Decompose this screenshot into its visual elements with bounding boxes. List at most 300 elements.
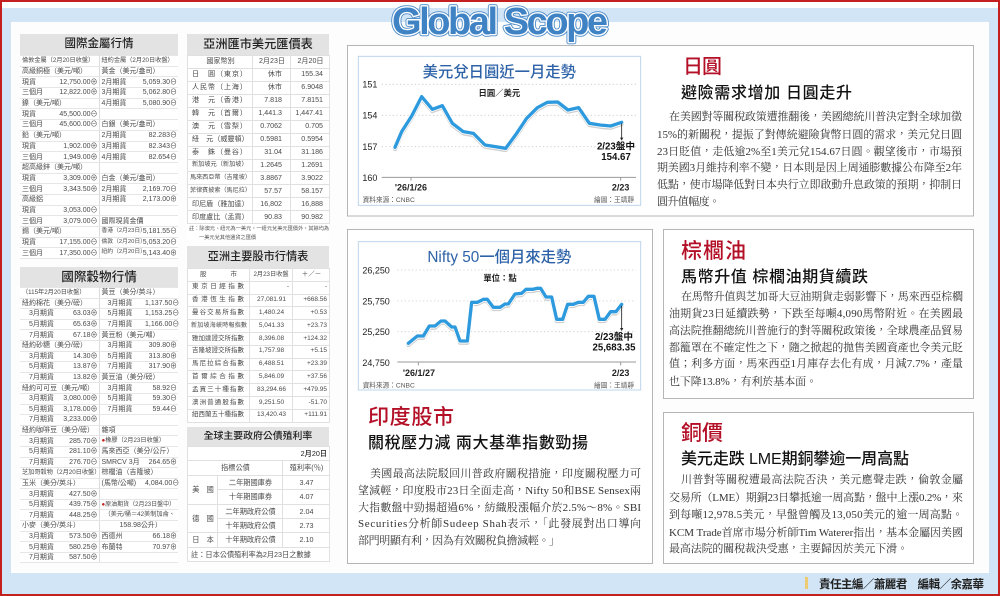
table: grain quotes: 3月期貨 xyxy=(108,385,132,392)
table: metals quotes: 3,343.50⊕ xyxy=(63,186,98,193)
table: metals quotes: 鎳（美元/噸） xyxy=(22,100,66,107)
table: grain quotes: 317.90⊕ xyxy=(149,363,177,370)
table: metals quotes xyxy=(20,55,178,259)
title: Global Scope: Global Scope xyxy=(392,1,608,43)
chart: USD/JPY one month: 151 xyxy=(362,80,377,90)
heading: copper: 銅價 xyxy=(681,422,723,445)
table: grain quotes: 67.18⊕ xyxy=(73,332,98,339)
table: stock indices: 紐西蘭五十種指數 xyxy=(192,411,244,418)
table: metals quotes: 3,079.00⊖ xyxy=(63,218,98,225)
table: grain quotes: 紐約棉花（美分/磅） xyxy=(22,300,87,307)
table: metals quotes: 12,822.00⊕ xyxy=(59,89,98,96)
table: grain quotes: 5月期貨 xyxy=(29,321,54,328)
table: FX quotes: 印尼盾（雅加達） xyxy=(192,200,249,208)
text block: yen: 低點，使市場降低對日本央行立即啟動升息政策的預期，抑制日 xyxy=(657,177,962,191)
table: grain quotes: 158.98公升） xyxy=(120,522,162,529)
chart: USD/JPY one month: 繪圖：王靖靜 xyxy=(594,195,634,204)
table: metals quotes: 現貨 xyxy=(22,79,36,86)
table: bond yields: 2.73 xyxy=(300,521,314,530)
table: stock indices: +668.56 xyxy=(303,296,327,303)
table: grain quotes: 3月期貨 xyxy=(29,395,54,402)
table: FX quotes: 7.818 xyxy=(264,96,282,104)
table: metals quotes: 錫（美元/噸） xyxy=(22,228,66,235)
table: grain quotes: 587.50⊕ xyxy=(69,554,98,561)
text block: yen: 期美國3月維持利率不變，日本則是因上周通膨數據公布降至2年 xyxy=(657,160,962,174)
table: bond yields: 2.10 xyxy=(300,535,314,544)
text block: palm oil: 也下降13.8%，有利於基本面。 xyxy=(669,374,817,388)
table: metals quotes: 三個月 xyxy=(22,154,43,161)
table: FX quotes: 印度盧比（孟買） xyxy=(192,213,249,221)
table: grain quotes: 7月期貨 xyxy=(29,554,54,561)
table: stock indices: 2月23日收盤 xyxy=(253,271,289,278)
chart: Nifty 50 one month xyxy=(358,242,641,390)
table: stock indices: - xyxy=(325,283,327,290)
text block: India stocks xyxy=(358,466,641,547)
table: metals quotes: 82.283⊖ xyxy=(149,132,177,139)
table: grain quotes: 西德州 xyxy=(102,533,122,540)
table: FX quotes: 31.04 xyxy=(264,148,282,156)
text block: palm oil: 油期貨23日延續跌勢，下跌至每噸4,090馬幣附近。在美國最 xyxy=(669,306,963,320)
heading: yen: 日圓 xyxy=(683,56,722,78)
heading: grains: 國際穀物行情 xyxy=(61,270,137,284)
table: stock indices: +0.53 xyxy=(311,309,327,316)
chart: Nifty 50 one month: 2/23 xyxy=(612,368,629,378)
table: FX quotes: 國家幣別 xyxy=(206,57,235,65)
table: metals quotes: 現貨 xyxy=(22,111,36,118)
chart: USD/JPY one month: 日圓／美元 xyxy=(479,88,521,98)
table: grain quotes: 7月期貨 xyxy=(108,321,132,328)
text block: copper: KCM Trade首席市場分析師Tim Waterer指出，基本金屬因美國 xyxy=(669,525,963,539)
table: FX quotes xyxy=(187,55,330,224)
table: metals quotes: 白金（美元/盎司） xyxy=(102,175,159,182)
table: grain quotes: 3,080.00⊕ xyxy=(63,395,98,402)
table: grain quotes: 7月期貨 xyxy=(29,416,54,423)
table: FX quotes: 1.2691 xyxy=(301,161,323,169)
table: bond yields: 二年期政府公債 xyxy=(225,507,276,516)
heading: metals xyxy=(20,34,178,55)
table: metals quotes: 2月期貨 xyxy=(102,186,126,193)
table: grain quotes: ●橡膠（2月23日收盤） xyxy=(102,437,165,444)
table: metals quotes: 紐約金屬（2月20日收盤） xyxy=(102,57,174,64)
table: metals quotes: 3月期貨 xyxy=(102,196,126,203)
table: metals quotes: 國際現貨金價 xyxy=(102,218,144,225)
table: metals quotes: 現貨 xyxy=(22,143,36,150)
table: metals quotes: 2,169.70⊖ xyxy=(143,186,177,193)
table: metals quotes: 現貨 xyxy=(22,207,36,214)
table: metals quotes: 17,350.00⊖ xyxy=(59,250,98,257)
table: grain quotes: 285.70⊕ xyxy=(69,438,98,445)
FX table note: 一美元兌其他通貨之匯價 xyxy=(199,235,256,241)
table: metals quotes: 5,062.80⊖ xyxy=(143,89,177,96)
table: stock indices: 6,488.51 xyxy=(259,360,284,367)
table: stock indices: - xyxy=(287,283,289,290)
table: FX quotes: 16,888 xyxy=(301,200,323,208)
panel: government bond yields table xyxy=(187,427,329,562)
table: grain quotes: 3月期貨 xyxy=(29,310,54,317)
text block: India stocks: 望減輕，印度股市23日全面走高，Nifty 50和BSE Sensex兩 xyxy=(358,483,641,497)
text block: India stocks: 部門明顯有利，因為有效關稅負擔減輕。」 xyxy=(358,533,560,547)
table: bond yields: 日 本 xyxy=(192,535,214,544)
panel: yen article and chart xyxy=(347,45,974,216)
subheading: yen: 避險需求增加 日圓走升 xyxy=(681,84,852,102)
table: FX quotes: 0.5981 xyxy=(260,135,282,143)
table: grain quotes: 雜項 xyxy=(102,427,116,434)
table: stock indices: 吉隆坡證交所指數 xyxy=(192,347,244,354)
table: grain quotes: 3,178.00⊕ xyxy=(63,406,98,413)
table: stock indices: +23.39 xyxy=(307,360,327,367)
table: stock indices: 馬尼拉綜合指數 xyxy=(192,360,244,367)
table: bond yields: 十年期政府公債 xyxy=(225,535,276,544)
FX table note: 註：除澳元、紐元為一美元，一紐元兌美元匯價外，其餘均為 xyxy=(189,226,329,232)
table: metals quotes: 2,173.00⊕ xyxy=(143,196,177,203)
footer credits: 責任主編／蕭麗君 編輯／余嘉華 xyxy=(819,577,984,591)
subheading: palm oil: 馬幣升值 棕櫚油期貨續跌 xyxy=(681,268,868,286)
table: grain quotes: 5月期貨 xyxy=(29,544,54,551)
table: bond yields: 十年期政府公債 xyxy=(225,521,276,530)
table: bond yields: 二年期國庫券 xyxy=(229,478,272,487)
table: grain quotes: ●原油期貨（2月23日盤中） xyxy=(102,502,175,508)
table: bond yields: 殖利率(％) xyxy=(290,463,323,472)
table: metals quotes: 3月期貨 xyxy=(102,143,126,150)
table: FX quotes: 0.705 xyxy=(305,122,323,130)
table: FX quotes: 58.157 xyxy=(301,187,323,195)
table: bond yields: 美 國 xyxy=(192,485,214,494)
table: grain quotes: （美元/桶＝42美制加侖、 xyxy=(104,511,175,518)
chart: Nifty 50 one month: 2/23盤中 xyxy=(595,331,633,343)
table: FX quotes: 7.8151 xyxy=(301,96,323,104)
table: grain quotes: (馬幣/公噸) xyxy=(102,480,136,487)
table: FX quotes: 馬來西亞幣（吉隆坡） xyxy=(190,174,251,181)
chart: Nifty 50 one month: '26/1/27 xyxy=(403,368,435,378)
subheading: India stocks: 關稅壓力減 兩大基準指數勁揚 xyxy=(368,434,588,452)
table: grain quotes: 3,233.00⊕ xyxy=(63,416,98,423)
table: bond yields: 十年期國庫券 xyxy=(229,492,272,501)
table: FX quotes: 2月20日 xyxy=(297,57,324,65)
table: FX quotes: 90.83 xyxy=(264,213,282,221)
table: FX quotes: 6.9048 xyxy=(301,83,323,91)
table: metals quotes: 三個月 xyxy=(22,186,43,193)
table: grain quotes: 1,153.25⊖ xyxy=(145,310,179,317)
chart: USD/JPY one month xyxy=(358,56,641,205)
table: metals quotes: 三個月 xyxy=(22,121,43,128)
table: grain quotes: 58.92⊖ xyxy=(152,385,177,392)
table: grain quotes: 4,084.00⊖ xyxy=(145,480,179,487)
text block: copper: 到每噸12,978.5美元，早盤曾觸及13,050美元的逾一周高點。 xyxy=(669,507,963,521)
table: metals quotes: 3月期貨 xyxy=(102,89,126,96)
panel: copper article xyxy=(663,412,974,564)
text block: palm oil: 高法院推翻總統川普施行的對等關稅政策後，全球農產品貿易 xyxy=(669,323,963,337)
heading: bonds: 全球主要政府公債殖利率 xyxy=(204,431,312,442)
table: grain quotes: 黃豆（美分/英斗） xyxy=(102,289,159,296)
table: metals quotes: 高級鋁 xyxy=(22,196,43,203)
chart: USD/JPY one month: '26/1/26 xyxy=(395,182,427,192)
table: FX quotes: 155.34 xyxy=(301,70,323,78)
text block: India stocks: 大指數盤中勁揚超過6%，紡織股漲幅介於2.5%～8%。SBI xyxy=(358,500,641,514)
chart: USD/JPY one month: 160 xyxy=(362,173,377,183)
table: grain quotes: 黃豆粉（美元/噸） xyxy=(102,332,159,339)
table: bond yields: 指標公債 xyxy=(221,463,250,472)
table: grain quotes: 馬來西亞（美分/公斤） xyxy=(102,448,173,455)
table: stock indices: 9,251.50 xyxy=(259,399,284,406)
table: grain quotes: 布蘭特 xyxy=(102,544,122,551)
text block: copper: 最高法院的關稅裁決受惠，主要歸因於美元下滑。 xyxy=(669,541,908,555)
table: stock indices: 股 市 xyxy=(200,271,237,278)
table: stock indices: 5,041.33 xyxy=(259,322,284,329)
text block: India stocks: Securities分析師Sudeep Shah表示，「此發展對出口導向 xyxy=(358,516,641,530)
table: grain quotes: 棕櫚油（吉隆坡） xyxy=(102,469,158,476)
table: metals quotes: 超高級鋅（美元/噸） xyxy=(22,164,87,171)
table: FX quotes: 1.2645 xyxy=(260,161,282,169)
text block: copper xyxy=(669,472,963,555)
table: metals quotes: 82.654⊖ xyxy=(149,154,177,161)
table: stock indices: 1,480.24 xyxy=(259,309,284,316)
heading: metals: 國際金屬行情 xyxy=(64,38,134,50)
table: grain quotes: 439.75⊕ xyxy=(69,501,98,508)
panel: Asian FX table xyxy=(187,34,329,240)
table: stock indices: 13,420.43 xyxy=(257,411,286,418)
heading: stocks: 亞洲主要股市行情表 xyxy=(208,251,308,263)
table: grain quotes: 5月期貨 xyxy=(29,501,54,508)
table: stock indices: 5,846.09 xyxy=(259,373,284,380)
table: grain quotes: 1,137.50⊖ xyxy=(145,300,179,307)
text block: yen: 在美國對等關稅政策遭推翻後，美國總統川普決定對全球加徵 xyxy=(669,109,962,123)
table: stock indices: 83,294.66 xyxy=(257,386,286,393)
table: FX quotes: 新加坡元（新加坡） xyxy=(192,161,248,168)
table: metals quotes: 4月期貨 xyxy=(102,154,126,161)
table: FX quotes: 90.982 xyxy=(301,213,323,221)
panel: India stocks article and chart xyxy=(347,229,653,564)
table: grain quotes: 黃豆油（美分/磅） xyxy=(102,374,159,381)
table: grain quotes: 1,166.00⊖ xyxy=(145,321,179,328)
table: grain quotes: 580.25⊕ xyxy=(69,544,98,551)
table: stock indices: -51.70 xyxy=(309,399,327,406)
table: stock indices: +23.73 xyxy=(307,322,327,329)
table: metals quotes: 高級銅極（美元/噸） xyxy=(22,68,87,75)
table: grain quotes: 63.03⊕ xyxy=(73,310,98,317)
table: bond yields xyxy=(187,446,330,562)
table: grain quotes: 7月期貨 xyxy=(29,459,54,466)
table: metals quotes: 2月期貨 xyxy=(102,132,126,139)
chart: USD/JPY one month: 154.67 xyxy=(601,152,631,163)
table: FX quotes: 0.5954 xyxy=(301,135,323,143)
heading: FX xyxy=(187,34,329,55)
table: FX quotes: 菲律賓披索（馬尼拉） xyxy=(190,187,251,194)
table: grain quotes: 芝加哥穀物（2月20日收盤） xyxy=(22,469,100,476)
table: stock indices xyxy=(187,268,330,423)
table: metals quotes: 紐約（2月20日） xyxy=(102,249,146,255)
chart: Nifty 50 one month: 26,250 xyxy=(362,265,390,275)
chart: USD/JPY one month: 154 xyxy=(362,111,377,121)
table: FX quotes: 31.186 xyxy=(301,148,323,156)
table: metals quotes: 2月期貨 xyxy=(102,79,126,86)
text block: copper: 川普對等關稅遭最高法院否決，美元應聲走跌，倫敦金屬 xyxy=(681,472,963,486)
table: stock indices: 27,081.91 xyxy=(257,296,286,303)
table: metals quotes: 5,053.20⊖ xyxy=(143,239,177,246)
heading: India stocks: 印度股市 xyxy=(368,406,454,429)
table: metals quotes: 12,750.00⊕ xyxy=(59,79,98,86)
table: metals quotes: 3,053.00⊖ xyxy=(63,207,98,214)
title: Global Scope: Global Scope xyxy=(392,1,608,43)
table: metals quotes: 現貨 xyxy=(22,239,36,246)
chart: USD/JPY one month: 資料來源：CNBC xyxy=(363,195,415,204)
table: FX quotes: 休市 xyxy=(268,83,282,91)
text block: palm oil: 都籠罩在不確定性之下，隨之掀起的拋售美國資產也令美元貶 xyxy=(669,340,963,354)
panel: international metals table xyxy=(20,34,178,258)
chart: Nifty 50 one month: 25,750 xyxy=(362,296,390,306)
table: metals quotes: 三個月 xyxy=(22,250,43,257)
chart: Nifty 50 one month: 25,250 xyxy=(362,327,390,337)
table: stock indices: 8,396.08 xyxy=(259,335,284,342)
table: metals quotes: 香港（2月23日） xyxy=(102,228,146,234)
table: grain quotes: 3月期貨 xyxy=(29,533,54,540)
table: FX quotes: 3.9022 xyxy=(301,174,323,182)
table: grain quotes: （115年2月20日收盤） xyxy=(22,289,86,296)
table: grain quotes: 玉米（美分/英斗） xyxy=(22,480,80,487)
table: FX quotes: 2月23日 xyxy=(259,57,285,65)
table: grain quotes: 59.44⊖ xyxy=(152,406,177,413)
table: grain quotes: 573.50⊕ xyxy=(69,533,98,540)
table: FX quotes: 紐 元（威靈頓） xyxy=(192,135,249,143)
table: stock indices: 新加坡海峽時報指數 xyxy=(191,323,247,329)
table: grain quotes: 59.30⊖ xyxy=(152,395,177,402)
table: metals quotes: 白銀（美元/盎司） xyxy=(102,121,159,128)
table: FX quotes: 休市 xyxy=(268,70,282,78)
table: grain quotes: 7月期貨 xyxy=(29,332,54,339)
table: grain quotes: 5月期貨 xyxy=(29,448,54,455)
table: grain quotes: 5月期貨 xyxy=(108,310,132,317)
table: grain quotes: 14.30⊕ xyxy=(73,353,98,360)
table: FX quotes: 0.7062 xyxy=(260,122,282,130)
table: FX quotes: 57.57 xyxy=(264,187,282,195)
table: grain quotes: 紐約可可豆（美元/噸） xyxy=(22,385,94,392)
heading: grains xyxy=(20,267,178,287)
chart: USD/JPY one month: 美元兌日圓近一月走勢 xyxy=(423,63,577,81)
table: FX quotes: 1,441.3 xyxy=(258,109,282,117)
table: metals quotes: 45,500.00⊖ xyxy=(59,111,98,118)
table: grain quotes: 3月期貨 xyxy=(29,438,54,445)
table: bond yields: 4.07 xyxy=(300,492,314,501)
table: grain quotes: 313.80⊕ xyxy=(149,353,177,360)
text block: yen: 23日貶值，走低逾2%至1美元兌154.67日圓。觀望後市，市場預 xyxy=(657,144,962,158)
panel: Asian stock markets table xyxy=(187,246,329,420)
text block: palm oil xyxy=(669,289,963,388)
text block: yen xyxy=(657,109,962,208)
title: Global Scope: Global Scope xyxy=(392,1,608,43)
table: grain quotes xyxy=(20,287,178,563)
table: metals quotes: 現貨 xyxy=(22,175,36,182)
table: stock indices: +479.95 xyxy=(303,386,327,393)
table: grain quotes: 紐約咖啡豆（美分/磅） xyxy=(22,427,94,434)
text block: palm oil: 值；利多方面，馬來西亞1月庫存去化有成，月減7.7%，產量 xyxy=(669,356,963,370)
chart: USD/JPY one month: 2/23盤中 xyxy=(597,141,635,153)
table: stock indices: 雅加達證交所指數 xyxy=(192,335,244,342)
table: metals quotes: 5,059.30⊖ xyxy=(143,79,177,86)
table: grain quotes: 70.97⊕ xyxy=(152,544,177,551)
table: stock indices: ＋／－ xyxy=(302,271,321,278)
table: grain quotes: 7月期貨 xyxy=(29,374,54,381)
chart: Nifty 50 one month: Nifty 50一個月來走勢 xyxy=(427,249,572,266)
table: grain quotes: 264.65⊕ xyxy=(149,459,177,466)
chart: Nifty 50 one month: 24,750 xyxy=(362,358,390,368)
table: FX quotes: 16,802 xyxy=(260,200,282,208)
chart: Nifty 50 one month: 資料來源：CNBC xyxy=(363,381,415,390)
table: grain quotes: 309.80⊕ xyxy=(149,342,177,349)
table: grain quotes: 448.25⊕ xyxy=(69,512,98,519)
table: grain quotes: SMRCV 3月 xyxy=(102,459,140,466)
table: stock indices: +124.32 xyxy=(303,335,327,342)
table: bond yields: 德 國 xyxy=(192,514,214,523)
table: grain quotes: 3月期貨 xyxy=(29,353,54,360)
text block: India stocks: 美國最高法院駁回川普政府關稅措施，印度關稅壓力可 xyxy=(370,466,641,480)
table: grain quotes: 276.70⊖ xyxy=(69,459,98,466)
heading: stocks xyxy=(187,246,329,268)
table: FX quotes: 韓 元（首爾） xyxy=(192,109,247,117)
table: FX quotes: 澳 元（雪梨） xyxy=(192,122,247,130)
table: FX quotes: 泰 銖（曼谷） xyxy=(192,148,247,156)
table: grain quotes: 3月期貨 xyxy=(108,300,132,307)
table: metals quotes: 倫敦金屬（2月20日收盤） xyxy=(22,57,94,64)
table: grain quotes: 281.10⊕ xyxy=(69,448,98,455)
table: grain quotes: 5月期貨 xyxy=(108,353,132,360)
table: stock indices: +37.56 xyxy=(307,373,327,380)
text block: copper: 交易所（LME）期銅23日攀抵逾一周高點，盤中上漲0.2%，來 xyxy=(669,490,963,504)
table: grain quotes: 65.63⊕ xyxy=(73,321,98,328)
FX table note xyxy=(189,225,329,241)
table: grain quotes: 66.18⊕ xyxy=(152,533,177,540)
subheading: copper: 美元走跌 LME期銅攀逾一周高點 xyxy=(681,449,909,468)
table: grain quotes: 13.87⊕ xyxy=(73,363,98,370)
table: grain quotes: 紐約砂糖（美分/磅） xyxy=(22,342,87,349)
heading: palm oil: 棕櫚油 xyxy=(681,240,746,263)
table: grain quotes: 3月期貨 xyxy=(108,342,132,349)
chart: USD/JPY one month: 2/23 xyxy=(612,182,629,192)
table: stock indices: 曼谷交易所指數 xyxy=(192,309,244,316)
table: metals quotes: 三個月 xyxy=(22,218,43,225)
table: grain quotes: 7月期貨 xyxy=(29,512,54,519)
table: stock indices: 首爾綜合指數 xyxy=(192,373,244,380)
table: metals quotes: 45,600.00⊖ xyxy=(59,121,98,128)
table: metals quotes: 4月期貨 xyxy=(102,100,126,107)
table: FX quotes: 1,447.41 xyxy=(295,109,323,117)
chart: USD/JPY one month: 157 xyxy=(362,142,377,152)
table: bond yields: 2.04 xyxy=(300,507,314,516)
table: bond yields: 註：日本公債殖利率為2月23日之數據 xyxy=(191,550,311,559)
table: grain quotes: 5月期貨 xyxy=(29,363,54,370)
panel: international grains table xyxy=(20,267,178,562)
heading: FX: 亞洲匯市美元匯價表 xyxy=(203,37,313,51)
table: grain quotes: 小麥（美分/英斗） xyxy=(22,522,80,529)
table: grain quotes: 3月期貨 xyxy=(29,491,54,498)
table: stock indices: 香港恆生指數 xyxy=(192,296,244,303)
table: bond yields: 3.47 xyxy=(300,478,314,487)
table: metals quotes: 三個月 xyxy=(22,89,43,96)
table: metals quotes: 3,309.00⊕ xyxy=(63,175,98,182)
table: stock indices: +5.15 xyxy=(311,347,327,354)
table: FX quotes: 3.8867 xyxy=(260,174,282,182)
table: metals quotes: 5,080.90⊖ xyxy=(143,100,177,107)
table: metals quotes: 倫敦（2月20日） xyxy=(102,239,146,245)
table: stock indices: +111.91 xyxy=(304,411,327,418)
text block: yen: 圓升值幅度。 xyxy=(657,194,720,208)
table: metals quotes: 黃金（美元/盎司） xyxy=(102,68,159,75)
heading: bonds xyxy=(187,427,329,446)
table: metals quotes: 82.343⊖ xyxy=(149,143,177,150)
table: metals quotes: 1,949.00⊕ xyxy=(63,154,98,161)
table: grain quotes: 7月期貨 xyxy=(108,363,132,370)
table: metals quotes: 5,181.55⊖ xyxy=(143,228,177,235)
table: grain quotes: 5月期貨 xyxy=(29,406,54,413)
chart: Nifty 50 one month: 繪圖：王靖靜 xyxy=(594,381,634,390)
